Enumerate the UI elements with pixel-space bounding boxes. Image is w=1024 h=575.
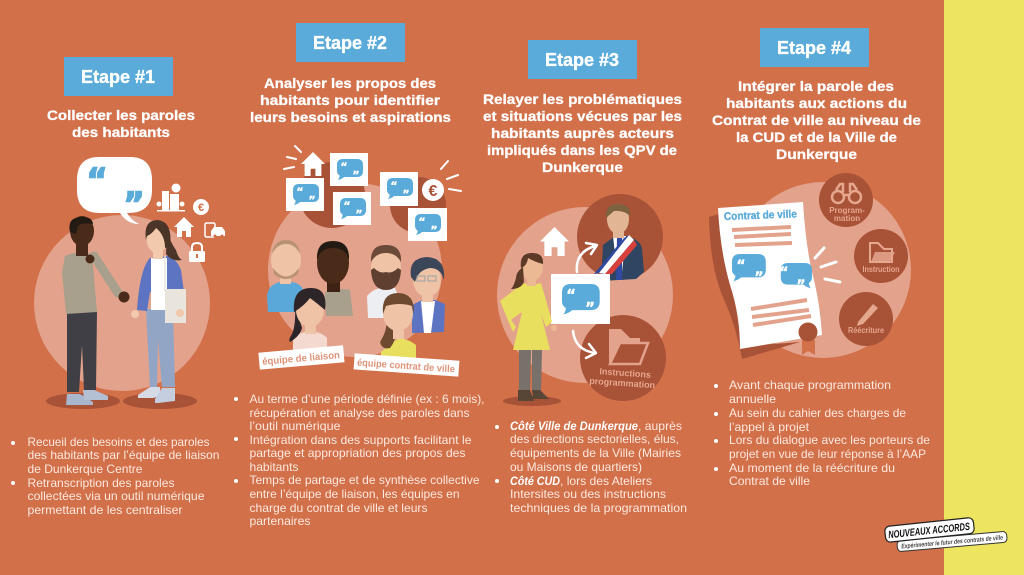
step 3 heading [483,91,682,175]
step 2 bullet list [234,392,484,528]
step 4 bullet list: Au moment de la réécriture du [729,461,895,475]
speech notes: “ [340,160,348,174]
document shadow [709,213,800,359]
step 3 bullet list: Côté CUD [510,474,560,488]
step 4 bullet list: annuelle [729,392,776,406]
step 4 bullet list: Au sein du cahier des charges de [729,406,906,420]
portrait: bearded man [367,245,401,318]
portrait: woman with pink top [289,288,327,353]
panel: step 4 [709,28,930,488]
step 2 bullet list: habitants [250,460,298,474]
document: contrat de ville: ” [796,278,806,294]
step 1 bullet list: collectées via un outil numérique [28,489,205,503]
step 3 heading: Dunkerque [542,159,623,175]
step 4 heading: habitants aux actions du [726,95,907,111]
step 3 bullet list: Côté Ville de Dunkerque [510,419,638,433]
step 2 heading: Analyser les propos des [264,75,436,91]
step 2 bullet list: récupération et analyse des paroles dans [250,406,470,420]
instructions programmation label: Instructions [599,366,651,380]
instructions programmation label: programmation [589,376,655,390]
step 1 heading [47,107,195,140]
step 3 heading: habitants auprès acteurs [491,125,674,141]
step 1 heading: des habitants [72,124,170,140]
icon: folder, instruction: Instruction [862,265,900,274]
panel: step 3 [483,40,687,515]
step 3 heading: et situations vécues par les [483,108,682,124]
label: équipe de liaison: équipe de liaison [262,350,340,368]
icon: pencil, réécriture: Réécriture [848,326,884,335]
woman in yellow dress [500,253,557,401]
icon: speech bubble: “ [86,161,108,199]
step 2 bullet list: l’outil numérique [250,419,341,433]
icon: house [174,217,194,237]
step 4 bullet list: Avant chaque programmation [729,378,891,392]
step 4 heading: Dunkerque [776,146,857,162]
step 4 heading: Intégrer la parole des [738,78,894,94]
note with speech bubble: ” [585,299,595,317]
step 3 badge: Etape #3 [545,50,619,70]
logo name pill: NOUVEAUX ACCORDS [888,521,971,541]
rays [815,248,840,282]
logo: Nouveaux Accords [884,517,1007,552]
step 2 bullet list: Au terme d’une période définie (ex : 6 mois), [250,392,484,406]
step 2 bullet list: Intégration dans des supports facilitant le [250,433,472,447]
icon: speech bubble [77,157,152,224]
step 2 heading: habitants pour identifier [260,92,441,108]
step 1 bullet list: de Dunkerque Centre [28,462,143,476]
step 4 bullet list: Lors du dialogue avec les porteurs de [729,433,930,447]
speech notes: ” [308,194,316,207]
speech notes: “ [390,180,398,192]
step 2 bullet list: partenaires [250,514,310,528]
panel: step 1 [11,57,225,517]
man [62,216,130,405]
step 4 bullet list: l’appel à projet [729,420,810,434]
speech notes: ” [355,208,363,221]
step 1 bullet list: des habitants par l’équipe de liaison [28,448,220,462]
icon: binoculars, programmation: mation [834,214,860,223]
icon: house [540,227,569,256]
document: contrat de ville: Contrat de ville [724,208,797,223]
wax seal with ribbon [798,322,818,355]
speech notes: “ [296,186,304,198]
portrait: man with blue shirt [267,240,304,312]
note with speech bubble [551,274,610,324]
step 4 heading: Contrat de ville au niveau de [712,112,921,128]
speech notes: “ [418,216,426,228]
icon: folder [609,329,648,364]
step 1 badge [64,57,173,96]
illustration: two residents talking [34,157,225,409]
icon: pencil, réécriture [839,292,893,346]
icon: building with location pin [156,184,185,212]
speech notes: ” [352,169,360,182]
step 3 heading: Relayer les problématiques [483,91,682,107]
portrait: man with beige shirt [317,241,353,316]
step 2 bullet list: charge du contrat de ville et leurs [250,501,428,515]
icon: euro coin [422,179,444,201]
step 3 bullet list: des directions sectorielles, élus, [510,432,679,446]
document: contrat de ville: ” [754,270,764,286]
icon: speech bubble: ” [123,185,145,223]
icon: folder, instruction [854,229,908,283]
step 3 badge [528,40,637,79]
step 4 bullet list: projet en vue de leur réponse à l’AAP [729,447,926,461]
icon: binoculars, programmation [819,173,873,227]
step 1 bullet list [11,435,220,517]
illustration: relaying speech [497,194,673,406]
icon: euro: € [198,202,204,214]
speech notes: “ [343,200,351,212]
note with speech bubble: “ [566,286,576,304]
document: contrat de ville [718,202,822,349]
step 1 badge: Etape #1 [81,67,155,87]
step 2 heading [250,75,451,125]
step 3 bullet list: équipements de la Ville (Mairies [510,446,681,460]
step 3 heading: impliqués dans les QPV de [487,142,677,158]
step 4 badge: Etape #4 [777,38,851,58]
panel: step 2 [234,23,484,528]
document: contrat de ville: “ [779,265,789,281]
step 2 badge [296,23,405,62]
step 4 heading [712,78,921,162]
yellow side band [944,0,1024,575]
step 4 heading: la CUD et de la Ville de [736,129,897,145]
portrait: woman with yellow top [380,293,416,358]
arrow: to elected official [577,243,597,272]
step 3 bullet list [495,419,687,515]
speech notes [286,153,447,241]
illustration: team analysing speech [258,146,461,377]
speech notes: ” [402,188,410,201]
step 2 bullet list: Temps de partage et de synthèse collective [250,473,480,487]
step 2 badge: Etape #2 [313,33,387,53]
icon: house with rays [284,146,461,191]
step 2 bullet list: entre l’équipe de liaison, les équipes en [250,487,460,501]
step 1 bullet list: Retranscription des paroles [28,476,174,490]
icon: vehicles [205,223,225,238]
step 2 bullet list: partage et appropriation des propos des [250,446,466,460]
icon: euro [193,199,209,215]
step 4 badge [760,28,869,67]
icon: euro coin: € [429,183,438,200]
step 3 bullet list: Intersites ou des instructions [510,487,666,501]
arrow: to instructions [573,331,596,358]
step 1 bullet list: Recueil des besoins et des paroles [28,435,210,449]
woman [131,220,186,403]
label: équipe contrat de ville: équipe contrat de ville [357,358,456,375]
document: contrat de ville: “ [736,258,746,274]
icon: padlock [189,243,205,262]
step 4 bullet list [714,378,930,488]
icon: binoculars, programmation: Program- [829,206,865,215]
step 2 heading: leurs besoins et aspirations [250,109,451,125]
speech notes: ” [430,224,438,237]
step 1 bullet list: permettant de les centraliser [28,503,183,517]
elected official with sash [594,204,644,281]
illustration: contract document [709,173,911,359]
instructions programmation label [589,366,655,390]
step 3 bullet list: ou Maisons de quartiers) [510,460,642,474]
step 3 bullet list: , lors des Ateliers [560,474,652,488]
step 3 bullet list: , auprès [638,419,682,433]
step 4 bullet list: Contrat de ville [729,474,810,488]
step 3 bullet list: techniques de la programmation [510,501,687,515]
step 1 heading: Collecter les paroles [47,107,195,123]
portrait: man with glasses [411,257,445,333]
